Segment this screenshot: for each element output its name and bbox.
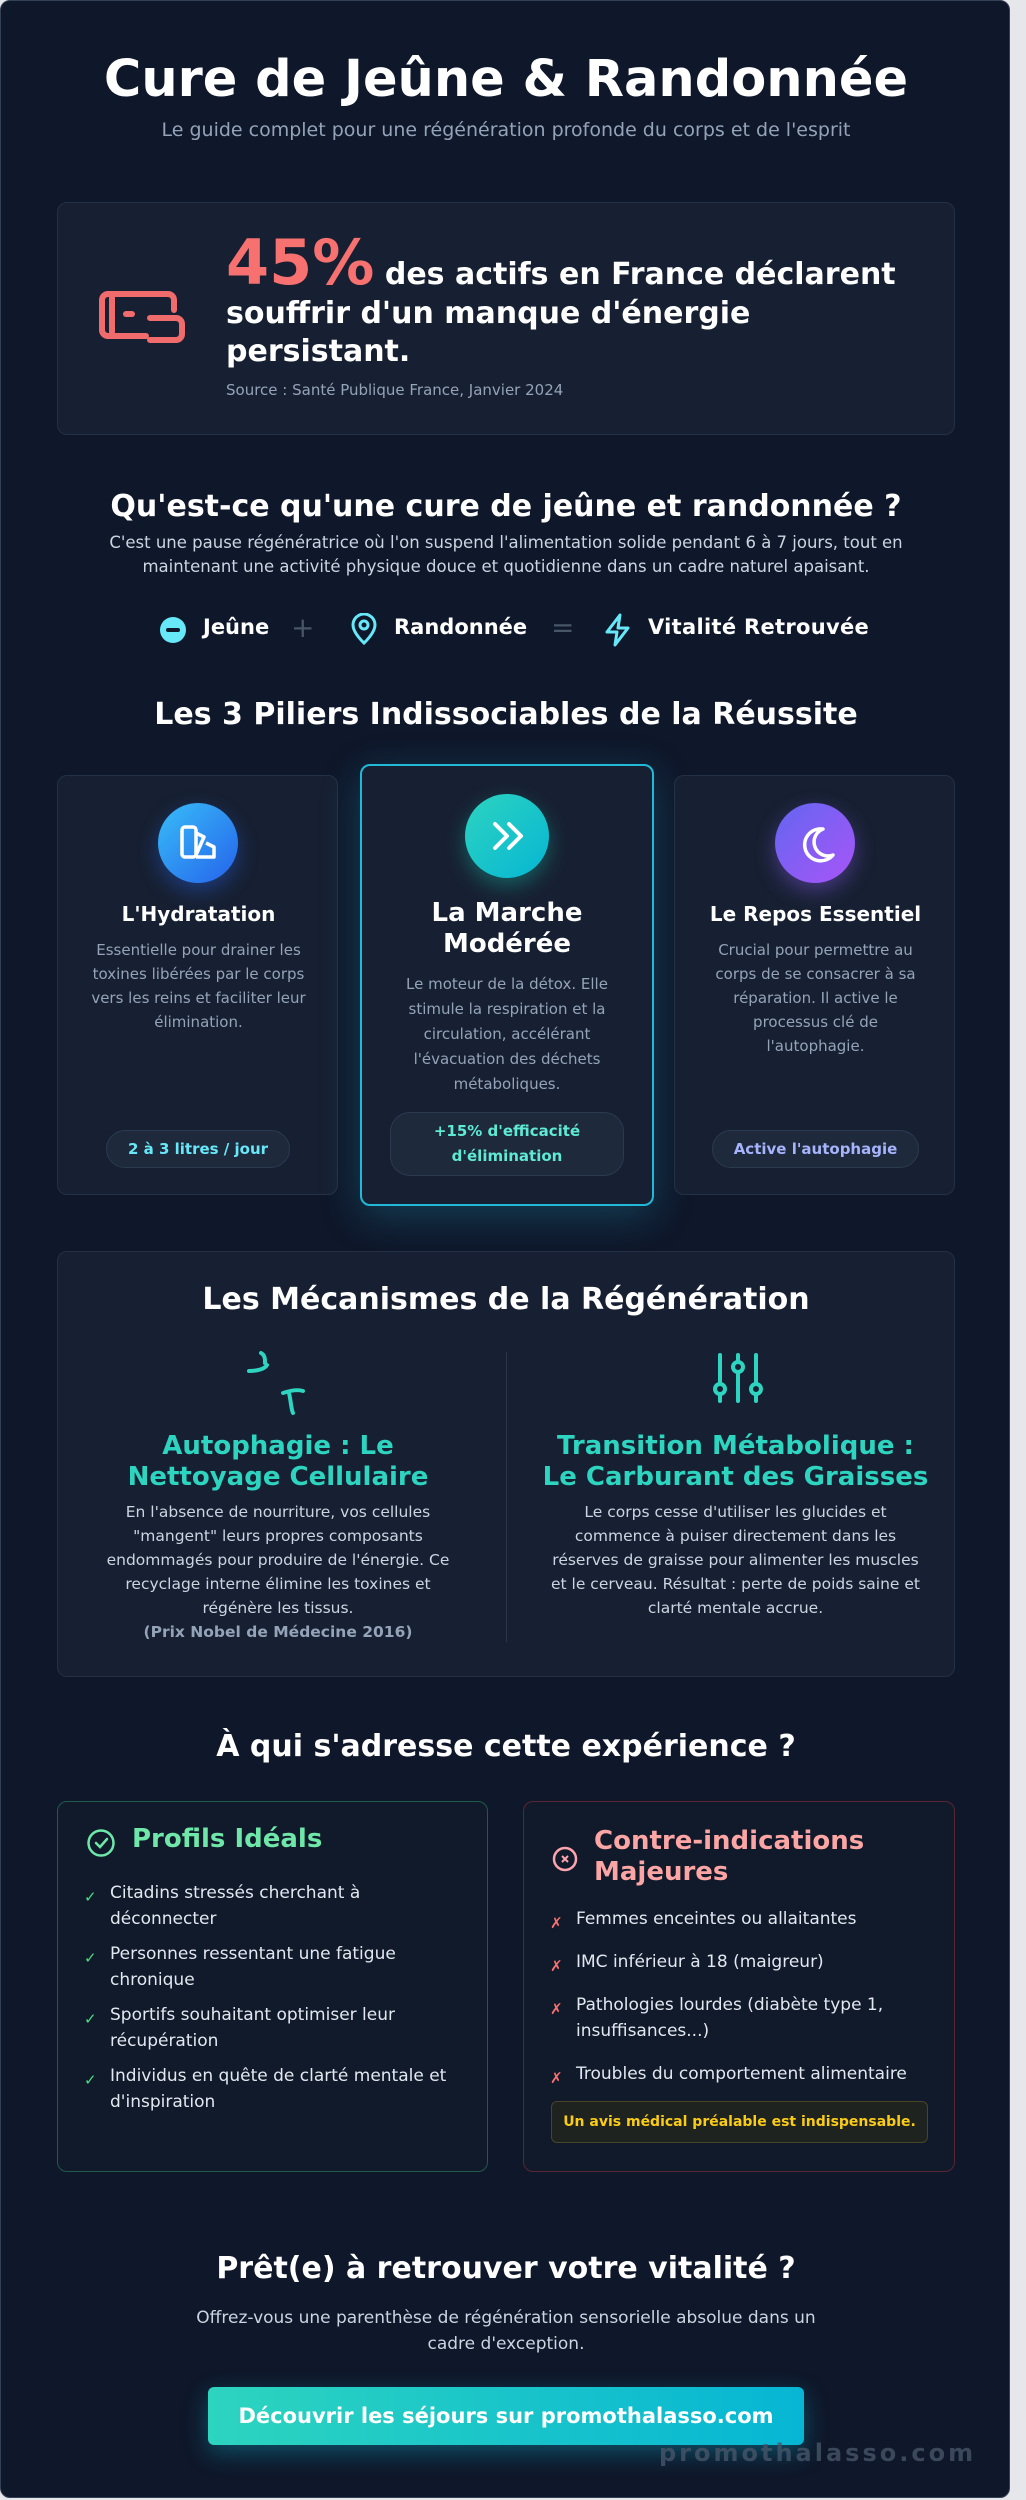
list: IMC inférieur à 18 (maigreur) [576, 1952, 824, 1972]
button [208, 2387, 804, 2445]
equation row: Jeûne [203, 615, 269, 639]
column: transition: Le corps cesse d'utiliser les glucides et commence à puiser directement dans les réserves de graisse pour alimenter les muscles et le cerveau. Résultat : perte de poids saine et clarté mentale accrue. [551, 1503, 920, 1617]
list: Citadins stressés cherchant à [110, 1883, 360, 1903]
panel: profils: Profils Idéals [132, 1824, 322, 1854]
panel: marche: Le moteur de la détox. Elle stimule la respiration et la circulation, accélérant l'évacuation des déchets métaboliques. [406, 975, 608, 1093]
badge: +15% d'efficacité d'élimination [434, 1122, 580, 1165]
column: transition: Le Carburant des Graisses [543, 1462, 928, 1492]
equation row: + [291, 611, 314, 644]
panel: marche [360, 764, 654, 1206]
list: ✓ [84, 2010, 97, 2028]
list: Sportifs souhaitant optimiser leur récupération [110, 2005, 395, 2051]
heading: piliers: Les 3 Piliers Indissociables de la Réussite [154, 697, 858, 732]
list: ✓ [84, 2071, 97, 2089]
column: autophagie: Nettoyage Cellulaire [128, 1462, 428, 1492]
badge: Active l'autophagie [734, 1140, 897, 1158]
icon: moon [775, 803, 855, 883]
equation row: = [551, 611, 574, 644]
warning note: Un avis médical préalable est indispensable. [563, 2114, 916, 2130]
list: ✗ [550, 2069, 563, 2087]
list: ✗ [550, 1914, 563, 1932]
subtitle: Le guide complet pour une régénération profonde du corps et de l'esprit [161, 119, 850, 141]
icon: recycle [247, 1350, 306, 1416]
badge: 2 à 3 litres / jour [128, 1140, 268, 1158]
panel: hydratation: Essentielle pour drainer les toxines libérées par le corps vers les reins et faciliter leur élimination. [91, 941, 306, 1031]
icon: x circle [552, 1846, 578, 1872]
list: ✓ [84, 1888, 97, 1906]
panel: hydratation [57, 775, 338, 1195]
icon: bolt [605, 614, 630, 646]
panel: contre-indications: Contre-indications Majeures [594, 1826, 864, 1887]
list: Individus en quête de clarté mentale et d'inspiration [110, 2066, 446, 2112]
panel: repos [674, 775, 955, 1195]
icon: pin [352, 613, 376, 645]
column: transition: Transition Métabolique : [557, 1431, 914, 1461]
panel: hydratation: L'Hydratation [122, 902, 275, 926]
panel: marche: La Marche Modérée [432, 898, 582, 959]
list [84, 1883, 446, 2112]
list: ✓ [84, 1949, 97, 1967]
heading: public: À qui s'adresse cette expérience ? [216, 1729, 796, 1764]
equation row: Vitalité Retrouvée [648, 615, 869, 639]
list: Pathologies lourdes (diabète type 1, insuffisances...) [576, 1995, 883, 2041]
list: Femmes enceintes ou allaitantes [576, 1909, 856, 1929]
source: Source : Santé Publique France, Janvier 2024 [226, 381, 563, 399]
heading: definition: Qu'est-ce qu'une cure de jeûne et randonnée ? [110, 489, 902, 524]
column: transition [543, 1353, 928, 1617]
badge [712, 1130, 919, 1168]
list: ✗ [550, 1957, 563, 1975]
equation row [160, 611, 869, 646]
button: Découvrir les séjours sur promothalasso.com [238, 2404, 774, 2428]
panel: stat [57, 202, 955, 435]
warning note [551, 2101, 928, 2143]
icon: sliders [713, 1353, 763, 1403]
panel: mécanismes [57, 1251, 955, 1677]
stat text: 45% des actifs en France déclarent souffrir d'un manque d'énergie persistant. [226, 226, 896, 369]
panel: profils [57, 1801, 488, 2172]
text: CTA: Offrez-vous une parenthèse de régénération sensorielle absolue dans un cadre d'exception. [196, 2308, 816, 2354]
column: autophagie: Autophagie : Le [162, 1431, 394, 1461]
list: déconnecter [110, 1909, 216, 1929]
badge [106, 1130, 290, 1168]
list: ✗ [550, 2000, 563, 2018]
text: definition: C'est une pause régénératrice où l'on suspend l'alimentation solide pendant 6 à 7 jours, tout en maintenant une activité physique douce et quotidienne dans un cadre naturel apaisant. [109, 533, 903, 576]
column: autophagie: En l'absence de nourriture, vos cellules "mangent" leurs propres composants endommagés pour produire de l'énergie. Ce recyclage interne élimine les toxines et régénère les tissus. [107, 1503, 449, 1617]
column: autophagie: (Prix Nobel de Médecine 2016) [144, 1623, 412, 1641]
list [550, 1909, 907, 2087]
heading: CTA: Prêt(e) à retrouver votre vitalité ? [216, 2251, 796, 2286]
icon: chevrons [465, 794, 549, 878]
panel: repos: Le Repos Essentiel [710, 902, 921, 926]
panel: contre-indications [523, 1801, 955, 2172]
list: Troubles du comportement alimentaire [576, 2064, 907, 2084]
equation row: Randonnée [394, 615, 527, 639]
watermark: promothalasso.com [659, 2439, 976, 2467]
icon: check circle [87, 1829, 115, 1857]
title: Cure de Jeûne & Randonnée [104, 50, 908, 109]
icon: battery [99, 291, 185, 343]
icon: minus [160, 617, 186, 643]
column: autophagie [107, 1350, 449, 1641]
heading: Les Mécanismes de la Régénération [202, 1282, 810, 1317]
icon: drop [158, 803, 238, 883]
panel: repos: Crucial pour permettre au corps de se consacrer à sa réparation. Il active le processus clé de l'autophagie. [715, 941, 916, 1055]
list: Personnes ressentant une fatigue chronique [110, 1944, 396, 1990]
badge [390, 1112, 624, 1176]
